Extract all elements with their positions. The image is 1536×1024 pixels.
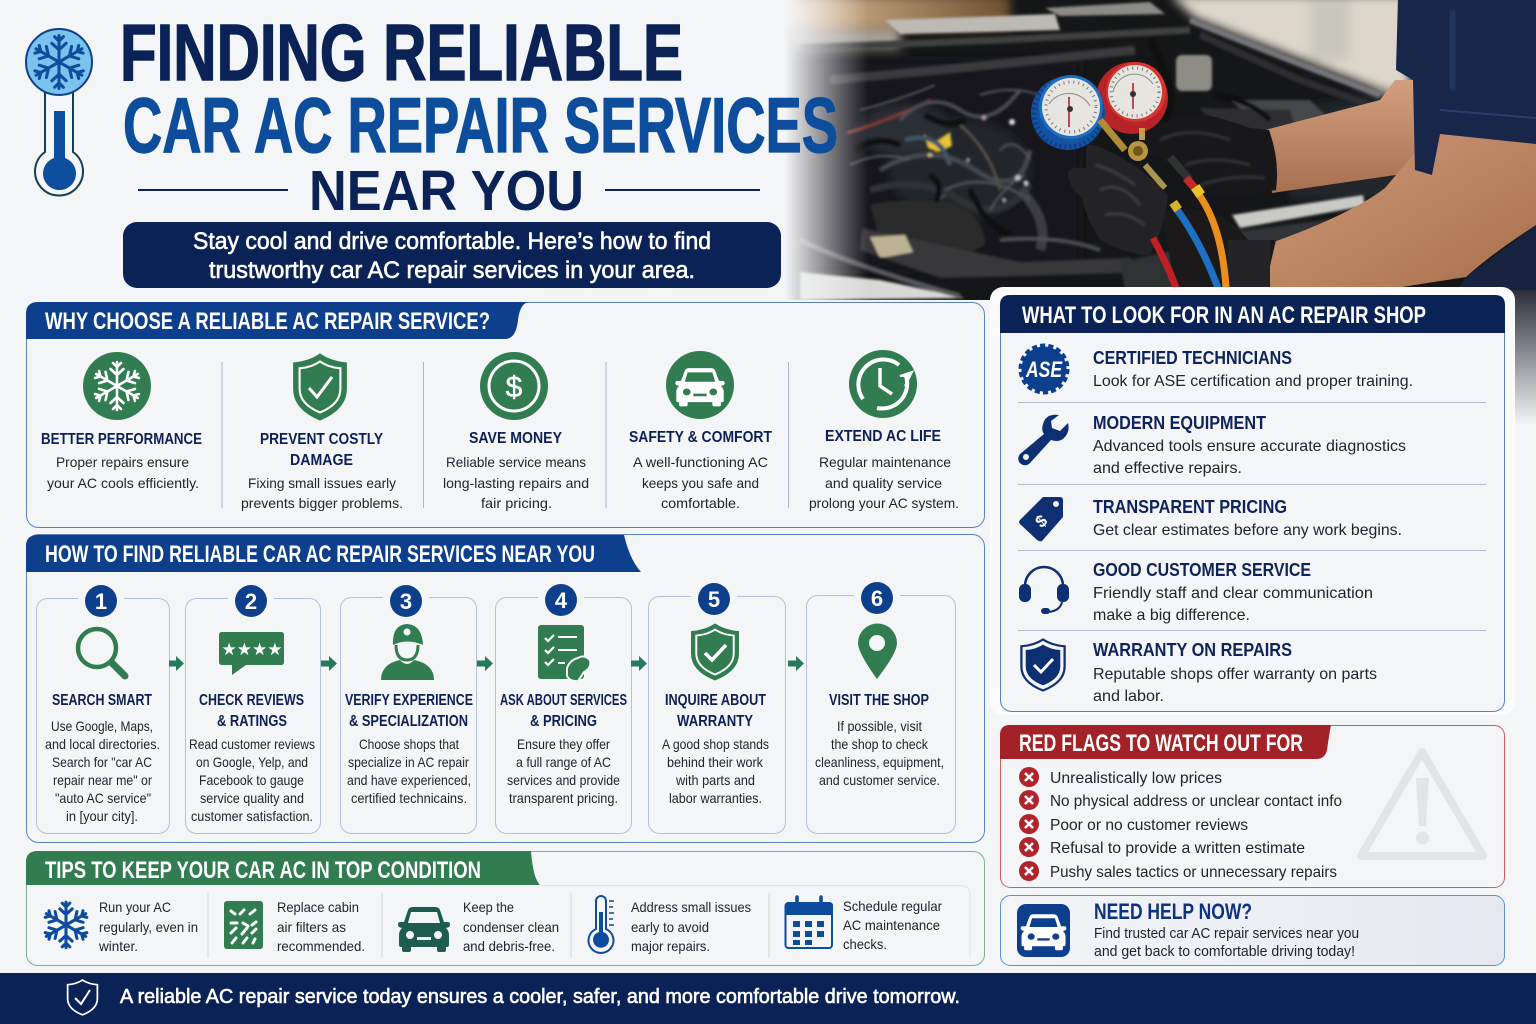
item: good customer service: GOOD CUSTOMER SERVICE — [1093, 560, 1311, 580]
icon: footer shield — [68, 980, 97, 1015]
hoses back glove — [1169, 230, 1276, 287]
tip: run ac: regularly, even in — [99, 919, 198, 935]
step 5 card: A good shop stands — [662, 736, 769, 752]
step 2 card: service quality and — [200, 790, 304, 806]
lower forearm — [1265, 130, 1536, 288]
step 1 card: in [your city]. — [66, 808, 138, 824]
heading: red flags — [1000, 725, 1331, 759]
step 3 card: specialize in AC repair — [348, 754, 469, 770]
callout: need help now: NEED HELP NOW? — [1094, 899, 1252, 924]
title: NEAR YOU — [309, 159, 584, 223]
step 6 card: and customer service. — [819, 772, 940, 788]
title: FINDING RELIABLE — [120, 8, 683, 97]
step 4 card: a full range of AC — [516, 754, 611, 770]
heading: what to look for — [1000, 295, 1505, 333]
callout: need help now: Find trusted car AC repair services near you — [1094, 926, 1359, 942]
tip: condenser: and debris-free. — [463, 938, 555, 954]
list: red flags: Poor or no customer reviews — [1050, 817, 1248, 834]
tip: condenser: Keep the — [463, 899, 514, 915]
step 1 card — [36, 585, 170, 834]
step 1 card: Use Google, Maps, — [51, 718, 153, 734]
item: modern equipment: and effective repairs. — [1093, 460, 1242, 477]
arrow 4 — [631, 656, 647, 671]
body and shirt — [1459, 225, 1536, 290]
step 4 card: transparent pricing. — [509, 790, 618, 806]
item: better performance — [41, 352, 202, 491]
tip: cabin filters: air filters as — [277, 919, 346, 935]
item: certified technicians — [1021, 346, 1413, 392]
item: prevent costly damage: DAMAGE — [290, 452, 353, 469]
item: extend ac life: EXTEND AC LIFE — [825, 428, 941, 445]
panel: what to look for — [990, 287, 1515, 715]
item: good customer service: make a big difference. — [1093, 607, 1250, 624]
subtitle banner: trustworthy car AC repair services in your area. — [209, 257, 695, 284]
item: extend ac life: and quality service — [825, 475, 942, 491]
item: modern equipment: MODERN EQUIPMENT — [1093, 413, 1266, 433]
step 5 card: INQUIRE ABOUT — [665, 692, 766, 709]
footer banner: A reliable AC repair service today ensures a cooler, safer, and more comfortable drive tomorrow. — [120, 986, 960, 1008]
black box and tray — [870, 201, 985, 258]
tip: small issues: Address small issues — [631, 899, 751, 915]
item: save money: SAVE MONEY — [469, 430, 562, 447]
item: extend ac life: Regular maintenance — [819, 454, 951, 470]
step 3 card: 3 — [400, 589, 412, 614]
step 5 card: labor warranties. — [669, 790, 762, 806]
tip: run ac — [43, 899, 198, 954]
step 2 card: 2 — [245, 589, 257, 614]
item: extend ac life — [809, 350, 959, 511]
item: certified technicians: Look for ASE certification and proper training. — [1093, 373, 1413, 390]
step 5 card: with parts and — [675, 772, 755, 788]
gauges — [1031, 62, 1168, 188]
item: save money: fair pricing. — [481, 495, 552, 511]
list: red flags: Pushy sales tactics or unnecessary repairs — [1050, 864, 1337, 881]
step 1 card: and local directories. — [45, 736, 160, 752]
step 5 card: 5 — [708, 587, 720, 612]
item: save money: long-lasting repairs and — [443, 475, 589, 491]
step 2 card: Facebook to gauge — [199, 772, 304, 788]
step 2 card: customer satisfaction. — [191, 808, 313, 824]
heading: tips: TIPS TO KEEP YOUR CAR AC IN TOP CONDITION — [45, 857, 481, 884]
item: modern equipment — [1018, 413, 1406, 477]
tip: cabin filters: Replace cabin — [277, 899, 359, 915]
item: good customer service — [1019, 560, 1373, 624]
subtitle banner: Stay cool and drive comfortable. Here’s how to find — [193, 228, 711, 255]
panel: why choose — [26, 302, 984, 528]
heading: red flags: RED FLAGS TO WATCH OUT FOR — [1019, 730, 1303, 757]
item: transparent pricing: Get clear estimates before any work begins. — [1093, 522, 1402, 539]
item: extend ac life: prolong your AC system. — [809, 495, 959, 511]
item: better performance: your AC cools efficiently. — [47, 475, 199, 491]
footer banner — [0, 973, 1536, 1024]
step 4 card: Ensure they offer — [517, 736, 610, 752]
title: CAR AC REPAIR SERVICES — [123, 81, 838, 169]
item: safety and comfort: A well-functioning AC — [633, 454, 768, 470]
top glove — [1205, 115, 1278, 191]
step 6 card: VISIT THE SHOP — [829, 692, 929, 709]
item: warranty on repairs — [1021, 640, 1377, 705]
item: transparent pricing: TRANSPARENT PRICING — [1093, 497, 1287, 517]
upper forearm — [1265, 80, 1430, 193]
photo right fade — [1505, 290, 1536, 425]
item: safety and comfort: SAFETY & COMFORT — [629, 429, 772, 446]
subtitle banner — [123, 222, 781, 288]
step 1 card: repair near me" or — [53, 772, 152, 788]
step 2 card: ★★★★ — [222, 640, 282, 659]
arrow 2 — [321, 656, 337, 671]
callout: need help now: and get back to comfortable driving today! — [1094, 944, 1355, 960]
list: red flags — [1019, 767, 1342, 881]
step 1 card: SEARCH SMART — [52, 692, 152, 709]
tip: cabin filters: recommended. — [277, 938, 365, 954]
item: warranty on repairs: Reputable shops offer warranty on parts — [1093, 666, 1377, 683]
item: better performance: Proper repairs ensure — [56, 454, 189, 470]
item: save money: $ — [506, 371, 523, 404]
item: warranty on repairs: WARRANTY ON REPAIRS — [1093, 640, 1292, 660]
item: certified technicians: ASE — [1025, 357, 1063, 382]
step 4 card: services and provide — [507, 772, 620, 788]
arrow 1 — [169, 656, 184, 671]
item: safety and comfort — [629, 351, 772, 511]
step 2 card — [186, 585, 320, 834]
tip: small issues — [588, 896, 751, 954]
step 1 card: 1 — [95, 589, 107, 614]
step 3 card: VERIFY EXPERIENCE — [345, 692, 473, 709]
item: warranty on repairs: and labor. — [1093, 688, 1164, 705]
step 2 card: on Google, Yelp, and — [196, 754, 308, 770]
step 3 card: certified technicains. — [351, 790, 467, 806]
step 1 card: "auto AC service" — [55, 790, 151, 806]
step 4 card: ASK ABOUT SERVICES — [500, 692, 627, 709]
heading: how to find: HOW TO FIND RELIABLE CAR AC REPAIR SERVICES NEAR YOU — [45, 541, 595, 568]
step 3 card: Choose shops that — [359, 736, 459, 752]
step 6 card: cleanliness, equipment, — [815, 754, 944, 770]
tip: small issues: major repairs. — [631, 938, 710, 954]
colored wires — [847, 100, 931, 133]
tip: run ac: winter. — [98, 938, 138, 954]
step 2 card: CHECK REVIEWS — [199, 692, 304, 709]
item: prevent costly damage: prevents bigger problems. — [241, 495, 403, 511]
heading: what to look for: WHAT TO LOOK FOR IN AN AC REPAIR SHOP — [1022, 302, 1426, 329]
item: prevent costly damage — [241, 353, 403, 511]
item: transparent pricing — [1019, 497, 1402, 541]
panel: tips — [26, 851, 984, 966]
tip: small issues: early to avoid — [631, 919, 709, 935]
hoses — [1153, 238, 1176, 288]
step 3 card — [340, 585, 476, 834]
tip: schedule: AC maintenance — [843, 917, 940, 933]
item: safety and comfort: comfortable. — [661, 495, 740, 511]
list: red flags: Unrealistically low prices — [1050, 770, 1222, 787]
icon: faint warning triangle — [1361, 752, 1483, 856]
step 5 card: behind their work — [667, 754, 764, 770]
icon: thermometer with snowflake — [26, 29, 92, 195]
step 5 card: WARRANTY — [677, 713, 753, 730]
shirt sleeve — [1396, 0, 1536, 175]
step 2 card: Read customer reviews — [189, 736, 315, 752]
step 6 card: the shop to check — [831, 736, 929, 752]
heading: why choose: WHY CHOOSE A RELIABLE AC REPAIR SERVICE? — [45, 308, 490, 335]
icon: faint exclamation mark — [1416, 778, 1429, 844]
lower glove — [1068, 145, 1168, 256]
list: red flags: Refusal to provide a written estimate — [1050, 840, 1305, 857]
step 5 card — [648, 583, 786, 834]
item: prevent costly damage: PREVENT COSTLY — [260, 431, 383, 448]
callout: need help now — [1000, 896, 1504, 966]
arrow 3 — [477, 656, 493, 671]
item: good customer service: Friendly staff and clear communication — [1093, 585, 1373, 602]
item: safety and comfort: keeps you safe and — [642, 475, 759, 491]
item: save money: Reliable service means — [446, 454, 586, 470]
photo: technician checking car AC with gauges — [760, 0, 1536, 300]
item: prevent costly damage: Fixing small issues early — [248, 475, 396, 491]
item: better performance: BETTER PERFORMANCE — [41, 431, 202, 448]
step 6 card: If possible, visit — [837, 718, 922, 734]
step 3 card: & SPECIALIZATION — [349, 713, 468, 730]
tip: schedule — [785, 897, 942, 952]
item: transparent pricing: $ — [1032, 511, 1051, 532]
step 4 card — [496, 584, 632, 834]
tip: schedule: Schedule regular — [843, 898, 942, 914]
step 6 card: 6 — [871, 586, 883, 611]
item: modern equipment: Advanced tools ensure accurate diagnostics — [1093, 438, 1406, 455]
item: save money — [443, 352, 589, 511]
step 6 card — [806, 582, 956, 834]
panel: how to find — [26, 534, 984, 842]
heading: why choose — [26, 302, 528, 339]
tip: run ac: Run your AC — [99, 899, 171, 915]
tip: schedule: checks. — [843, 936, 887, 952]
tip: condenser — [398, 899, 559, 954]
step 4 card: 4 — [555, 588, 568, 613]
panel: red flags — [1000, 725, 1504, 888]
heading: tips — [26, 851, 540, 885]
tip: condenser: condenser clean — [463, 919, 559, 935]
hood and top bands — [885, 14, 1060, 34]
heading: how to find — [26, 535, 641, 572]
tip: cabin filters — [224, 899, 365, 954]
title — [120, 8, 838, 223]
item: certified technicians: CERTIFIED TECHNICIANS — [1093, 348, 1292, 368]
step 1 card: Search for "car AC — [52, 754, 152, 770]
step 2 card: & RATINGS — [217, 713, 287, 730]
list: red flags: No physical address or unclear contact info — [1050, 793, 1342, 810]
arrow 5 — [788, 656, 804, 671]
step 3 card: and have experienced, — [347, 772, 471, 788]
step 4 card: & PRICING — [530, 713, 597, 730]
